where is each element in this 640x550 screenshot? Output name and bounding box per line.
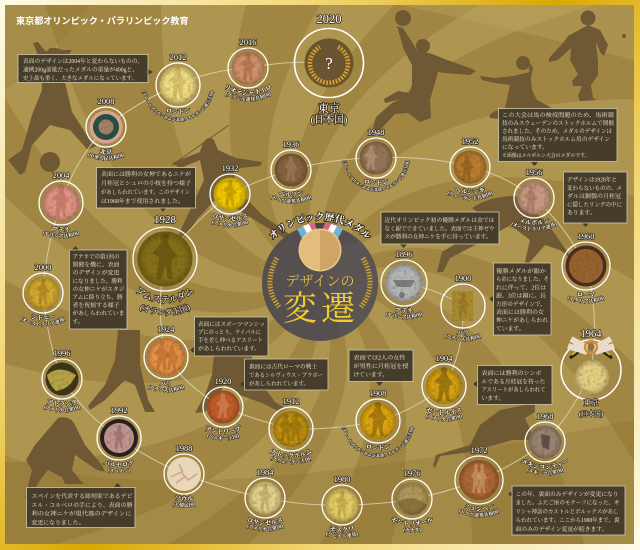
medal 1952 Helsinki: (フィンランド共和国) [446,190,494,201]
medal 1952 Helsinki [446,137,494,201]
medal 1960 Rome [561,232,611,304]
medal 1984 Los Angeles: ロサンゼルス [247,516,284,526]
medal 1976 Montreal [391,469,433,533]
medal 2008 Beijing: 北京 [99,148,112,156]
medal 1948 London: ロンドン [364,178,388,186]
callout: 1924: 手を差し伸べるアスリート [198,336,263,344]
medal 1904 St. Louis: セントルイス [425,405,463,417]
callout: 2004 [70,246,127,329]
callout: 1908 [349,350,413,386]
medal 2000 Sydney [20,263,66,327]
medal 1992 Barcelona: (スペイン) [107,468,131,474]
medal 1956 Melbourne: 1956 [526,168,542,177]
callout: 1956: ※画像はメルボルン大会のメダルです。 [502,152,590,159]
medal 2012 London: ロンドン [166,108,190,115]
callout: 1904: います。 [482,395,504,402]
medal 1896 Athens [380,250,428,320]
callout: 1904: 表面には勝利のシンボ [482,369,542,377]
medal 1964 Tokyo: 東京 [584,397,599,407]
medal 1896 Athens: 1896 [396,250,412,259]
medal 1896 Athens: (ギリシア共和国) [384,311,424,321]
medal 2012 London [141,53,215,122]
medal 1948 London: 1948 [368,128,384,137]
medal 1936 Berlin: ベルリン [278,190,304,198]
callout: 1896: なく銀でできていました。表面では主神ゼウ [384,224,494,232]
medal 1992 Barcelona [96,406,142,474]
central badge: デザインの変遷: デザインの [285,274,355,290]
callout: 1928: 表面には勝利の女神であるニケが [101,170,191,178]
medal 1968 Mexico City: 1968 [537,412,553,421]
medal 1972 Munich: 1972 [471,446,487,455]
medal 1920 Antwerp: アントワープ [204,424,243,436]
medal 1984 Los Angeles: 1984 [257,468,274,477]
callout: 1992: エル・コルベロの手により、表面の勝 [32,501,133,509]
medal 2012 London: 2012 [170,53,186,62]
medal 1968 Mexico City [520,412,568,476]
callout: 1920 [240,359,328,390]
medal 1900 Paris: パリ [456,329,470,337]
medal 1912 Stockholm: (スウェーデン王国) [269,455,313,466]
medal 1996 Atlanta: アトランタ [46,398,77,407]
timeline connector [43,62,595,505]
callout: 1924: プにのっとり、ライバルに [198,329,261,336]
callout: 2004: になりました。勝利 [72,277,123,285]
central badge: デザインの変遷: 変遷 [283,290,359,328]
medal 1960 Rome: (イタリア共和国) [567,295,605,304]
callout: 1960: ダルは銅製の月桂冠 [567,192,621,200]
callout: 2004: があしらわれていま [72,310,124,317]
callout: 1992: 変更になりました。 [32,518,84,526]
medal 1992 Barcelona: 1992 [111,406,127,415]
medal 1972 Munich [454,446,504,518]
callout: 2004: 者を祝福する様子 [72,301,120,309]
medal 1924 Paris: パリ [159,380,173,388]
callout: 1924: があしらわれています。 [198,345,260,352]
callout: 1920: があしらわれています。 [249,380,309,388]
callout: 2012: 史上最も重く、大きなメダルになっています。 [23,74,137,82]
callout: 1900: 方形のデザインで、 [496,300,546,308]
medal 1980 Moscow: モスクワ [330,526,354,534]
callout: 1960: 変わらないものの、メ [567,184,622,192]
medal 1980 Moscow: 1980 [334,475,350,484]
medal 1972 Munich: (ドイツ連邦共和国) [458,508,500,518]
medal 2004 Athens [38,171,84,239]
callout: 1956: になっています。 [502,144,548,151]
callout: 1992: 利の女神ニケが現代風のデザインに [32,510,132,518]
callout: 1928: は1968年まで使用されました。 [101,197,184,205]
medal 1996 Atlanta [41,349,83,413]
medal 2000 Sydney: 2000 [35,263,51,272]
callout: 1904: アスリートがあしらわれて [482,387,546,394]
medal 2020 Tokyo: 東京 [318,102,340,115]
medal 2016 Rio [224,38,272,102]
medal 1908 London [341,389,415,458]
medal 1920 Antwerp: 1920 [215,377,231,386]
medal 1924 Paris: (フランス共和国) [146,384,186,394]
callout: 1896: 近代オリンピック初の優勝メダルは金では [384,216,495,224]
medal 1968 Mexico City: (メキシコ合衆国) [526,467,564,476]
callout: 1956: 馬術競技のみストックホルム用のデザイン [502,135,610,143]
medal 1996 Atlanta: (アメリカ合衆国) [43,404,81,413]
medal 1928 Amsterdam [132,214,198,316]
medal 2000 Sydney: シドニー [31,314,56,321]
callout: 2012 [18,54,153,82]
callout: 1900: ています。 [496,325,525,332]
callout: 2012: 通例200g前後だったメダルの重量が400gと、 [23,65,138,73]
callout: 1972: 面のみのデザイン変更が続きます。 [516,525,608,533]
medal 2016 Rio: (ブラジル連邦共和国) [224,92,272,102]
callout: 2004: す。 [72,318,84,325]
medal 1900 Paris: 1900 [455,274,471,283]
medal 1952 Helsinki: 1952 [462,137,478,146]
callout: 1992 [26,483,135,528]
callout: 1900: れに伴って、2位は [496,283,546,291]
medal 2012 London: (グレートブリテンおよび北部アイルランド連合王国) [141,90,215,122]
callout: 1900: 優勝メダルが銀か [496,267,546,275]
medal 1924 Paris: 1924 [158,325,175,334]
medal 1984 Los Angeles: (アメリカ合衆国) [246,524,284,532]
medal 1912 Stockholm [268,397,314,465]
medal 1988 Seoul: (大韓民国) [172,501,196,508]
callout: 1900: 銀、3位は銅に。長 [496,292,546,300]
central badge: デザインの変遷: オリンピック歴代メダル [268,211,371,240]
callout: 1992: スペインを代表する彫刻家であるデビ [32,492,133,500]
medal 1936 Berlin: (ドイツ連邦共和国) [270,194,312,204]
medal 1908 London: 1908 [370,389,386,398]
medal 1920 Antwerp: (ベルギー王国) [206,433,240,442]
medal 2008 Beijing: (中華人民共和国) [87,152,125,162]
medal 1904 St. Louis [421,354,467,422]
callout: 1960: あります。 [567,210,596,217]
medal 1904 St. Louis: (アメリカ合衆国) [425,413,464,423]
medal 1928 Amsterdam: 1928 [154,214,176,226]
medal 1976 Montreal: モントリオール [391,516,433,528]
medal 2008 Beijing [85,97,127,162]
medal 1932 Los Angeles: ロサンゼルス [212,212,248,222]
medal 1900 Paris [440,274,486,342]
medal 1912 Stockholm: ストックホルム [269,447,313,460]
medal 1952 Helsinki: ヘルシンキ [454,186,485,195]
callout: 1896: スが勝利の女神ニケを手に持っています。 [384,233,492,241]
medal 1936 Berlin: 1936 [283,140,299,149]
medal 1932 Los Angeles [209,164,251,228]
medal 1908 London: (グレートブリテンおよび北部アイルランド連合王国) [341,426,415,459]
medal 1920 Antwerp [202,377,244,441]
medal 2004 Athens: (ギリシア共和国) [42,230,80,239]
callout: 1972: この年、裏面のみデザインが変更になり [516,490,618,498]
callout: 1960: に隠したリングの中に [567,200,622,208]
medal 1964 Tokyo: 1964 [580,329,602,340]
callout: 1972: ました。ふたご座のモチーフになった、ギ [516,499,620,507]
medal 1976 Montreal: (カナダ) [402,526,422,533]
medal 1992 Barcelona: バルセロナ [102,460,134,468]
medal 1968 Mexico City: メキシコシティー [520,458,568,470]
callout: 2004: アテネでの第1回の [72,252,120,260]
callout: 1904 [473,366,552,404]
medal 1948 London: (グレートブリテンおよび北部アイルランド連合王国) [342,160,410,192]
medal 1912 Stockholm: 1912 [283,397,299,406]
medal 2020 Tokyo: (日本国) [311,113,347,126]
medal 1960 Rome: 1960 [578,232,594,241]
medal 2020 Tokyo [294,12,364,126]
callout: 1928 [96,168,196,212]
medal 1972 Munich: ミュンヘン [464,504,494,512]
medal 2016 Rio: リオデジャネイロ [224,84,272,96]
medal 1956 Melbourne: (オーストラリア連邦) [510,222,558,232]
callout: 1956 [498,108,617,166]
callout: 1908: 表面では2人の女性 [354,354,406,362]
callout: 1956: 技のみスウェーデンのストックホルムで開催 [502,119,614,127]
medal 1980 Moscow: (ソビエト連邦) [326,531,359,539]
callout: 1928: 月桂冠とシュロの小枝を持つ様子 [101,179,191,187]
callout: 1900: 神ニケがあしらわれ [496,316,548,324]
medal 2004 Athens: アテネ [52,226,70,234]
callout: 1924 [190,317,268,356]
callout: 1960 [564,172,627,227]
medal 1932 Los Angeles: (アメリカ合衆国) [211,220,249,228]
callout: 1920: 裏面には古代ローマの戦士 [249,362,317,370]
callout: 1956: この大会は馬の検疫問題のため、馬術競 [502,111,614,119]
callout: 2004: 開催を機に、表面 [72,261,120,269]
medal 1960 Rome: ローマ [577,292,596,297]
callout: 1908: けています。 [354,372,388,378]
callout: 1972: リシャ神話のカストルとポルックスがあし [516,507,619,515]
medal 1984 Los Angeles [244,468,286,532]
medal 2008 Beijing: 2008 [98,97,114,106]
medal 1924 Paris [143,325,189,393]
callout: 1900 [489,263,551,335]
medal 2020 Tokyo: 2020 [316,12,342,26]
callout: 1904: ルである月桂冠を持った [482,377,546,385]
medal 1964 Tokyo [561,329,621,418]
callout: 1956: されました。そのため、メダルのデザインは [502,127,612,135]
callout: 1972 [508,486,625,535]
callout: 1900: ら金になりました。そ [496,275,549,283]
medal 2016 Rio: 2016 [240,38,256,47]
medal 1948 London [342,128,410,192]
callout: 2004: アムに降り立ち、勝 [72,293,123,301]
medal 1896 Athens: アテネ [394,306,414,315]
callout: 1908: が男性に月桂冠を授 [354,362,409,370]
medal 1964 Tokyo: (日本国) [579,409,603,418]
medal 1980 Moscow [321,475,363,539]
medal 1988 Seoul: 1988 [176,444,192,453]
medal 1976 Montreal: 1976 [404,469,420,478]
medal 1928 Amsterdam: アムステルダム [136,286,194,304]
title: 東京都オリンピック・パラリンピック教育 [16,15,189,26]
medal 2004 Athens: 2004 [53,171,70,180]
medal 1996 Atlanta: 1996 [54,349,70,358]
medal 1932 Los Angeles: 1932 [222,164,238,173]
callout: 2004: の女神ニケがスタジ [72,285,125,293]
callout: 2004: のデザインが変更 [72,269,120,277]
callout: 1928: があしらわれています。このデザイン [101,188,190,196]
callout: 2012: 表面のデザインは2004年と変わらないものの、 [23,57,143,65]
medal 1904 St. Louis: 1904 [436,354,453,363]
medal 2020 Tokyo: ? [325,54,333,73]
medal 1988 Seoul [163,444,205,508]
medal 1928 Amsterdam: (オランダ王国) [139,302,192,317]
callout: 1924: 表面にはスポーツマンシッ [198,320,265,328]
callout: 1896 [381,212,499,248]
medal 1936 Berlin [270,140,312,204]
callout: 1960: デザインは1928年と [567,176,617,184]
central badge: デザインの変遷 [262,211,378,341]
medal 1956 Melbourne [510,168,558,232]
callout: 1900: 表面には勝利の女 [496,308,544,316]
medal 1988 Seoul: ソウル [175,495,194,502]
medal 1908 London: ロンドン [365,442,392,452]
callout: 1920: であるシルヴィウス・ブラボー [249,371,323,379]
callout: 1972: らわれています。ここから1988年まで、裏 [516,516,620,524]
medal 1900 Paris: (フランス共和国) [443,333,483,343]
medal 2000 Sydney: (オーストラリア連邦) [20,316,66,327]
medal 1956 Melbourne: メルボルン [518,218,549,226]
